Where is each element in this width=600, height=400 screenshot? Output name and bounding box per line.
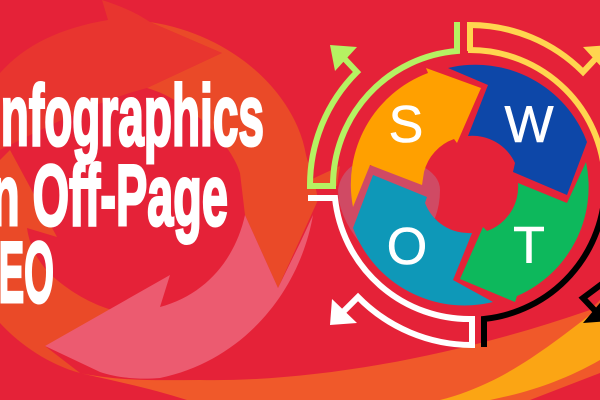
- lime arrowhead: [330, 45, 357, 71]
- W segment: blue arrow: [448, 65, 587, 195]
- bottom swoosh: amber: [440, 307, 600, 400]
- SWOT cycle: [308, 22, 600, 347]
- lime outline arrow: [310, 22, 457, 186]
- white outline arrow: [308, 198, 472, 345]
- faint orange tip behind the lime arrow: [310, 166, 340, 186]
- letter S: S: [389, 96, 423, 154]
- letter T: T: [513, 217, 545, 275]
- title: [0, 68, 264, 321]
- S segment: orange arrow: [351, 68, 481, 207]
- white arrowhead: [330, 299, 357, 325]
- background swirl: pink arrow: [45, 215, 313, 379]
- yellow outline arrow: [468, 25, 600, 185]
- black outline arrow: [484, 185, 600, 347]
- O segment: teal arrow: [353, 175, 493, 305]
- background swirl: faint arrow: [0, 0, 222, 150]
- black arrowhead: [583, 297, 600, 323]
- title: Infographics: [0, 68, 264, 164]
- bottom corner: red: [530, 373, 600, 400]
- background swirl: lower-left orange band: [0, 150, 112, 373]
- translucent swirl tip behind the segments: [338, 165, 440, 250]
- bottom swoosh: orange: [75, 300, 600, 400]
- T segment: green arrow: [460, 162, 589, 302]
- letter W: W: [504, 96, 554, 154]
- letter O: O: [387, 218, 427, 276]
- yellow arrowhead: [583, 45, 600, 71]
- background swirl: orange arrow: [147, 22, 318, 288]
